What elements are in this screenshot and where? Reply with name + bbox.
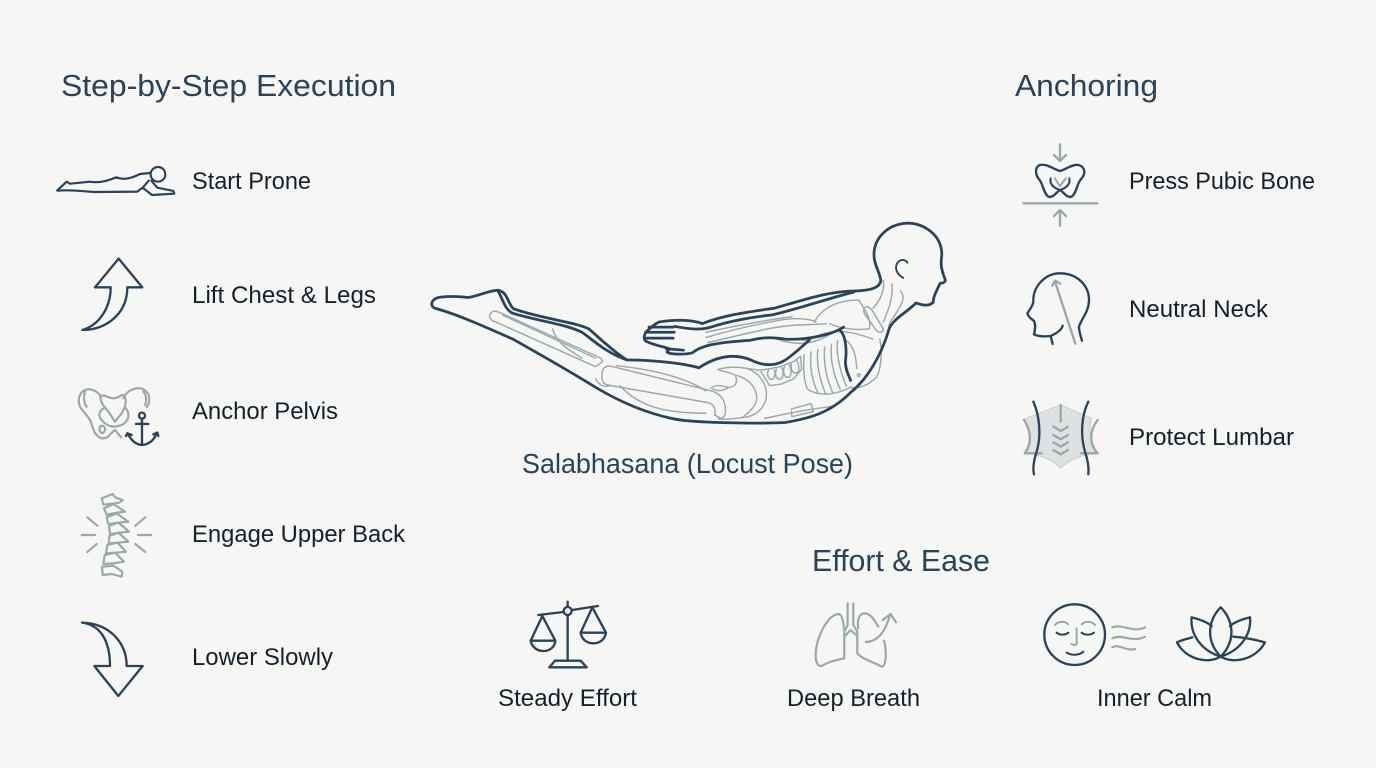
icon: calm face, breath waves and lotus — [1044, 604, 1265, 665]
panel: step-by-step execution — [57, 68, 406, 696]
icon: spine with radiating lines — [82, 494, 151, 577]
icon: pelvis with anchor — [79, 388, 158, 445]
icon: balance scale — [531, 602, 606, 667]
panel: effort and ease — [498, 543, 1265, 712]
anatomy details — [490, 281, 903, 419]
label: start prone: Start Prone — [192, 168, 311, 195]
heading: step-by-step execution: Step-by-Step Execution — [61, 68, 396, 103]
icon: head with neck alignment arrow — [1027, 273, 1089, 344]
icon: lungs with breath arrow — [816, 603, 896, 667]
icon: prone body — [57, 167, 174, 195]
label: steady effort: Steady Effort — [498, 685, 637, 712]
panel: anchoring — [1015, 68, 1315, 474]
label: engage upper back: Engage Upper Back — [192, 521, 406, 548]
label: press pubic bone: Press Pubic Bone — [1129, 168, 1315, 195]
label: deep breath: Deep Breath — [787, 685, 920, 712]
icon: curved arrow up — [82, 259, 142, 330]
ear — [896, 260, 907, 278]
label: neutral neck: Neutral Neck — [1129, 296, 1269, 323]
icon: protected lumbar spine — [1024, 402, 1098, 474]
heading: effort and ease: Effort & Ease — [812, 543, 990, 578]
icon: curved arrow down — [82, 623, 143, 696]
illustration: locust pose anatomical figure — [432, 223, 945, 423]
label: inner calm: Inner Calm — [1097, 685, 1212, 712]
heading: anchoring: Anchoring — [1015, 68, 1158, 103]
caption: salabhasana: Salabhasana (Locust Pose) — [522, 448, 853, 479]
label: lift chest and legs: Lift Chest & Legs — [192, 282, 376, 309]
label: lower slowly: Lower Slowly — [192, 644, 333, 671]
icon: pelvis pressed to floor — [1024, 144, 1097, 226]
label: anchor pelvis: Anchor Pelvis — [192, 398, 338, 425]
label: protect lumbar: Protect Lumbar — [1129, 424, 1294, 451]
body outline — [432, 223, 945, 423]
